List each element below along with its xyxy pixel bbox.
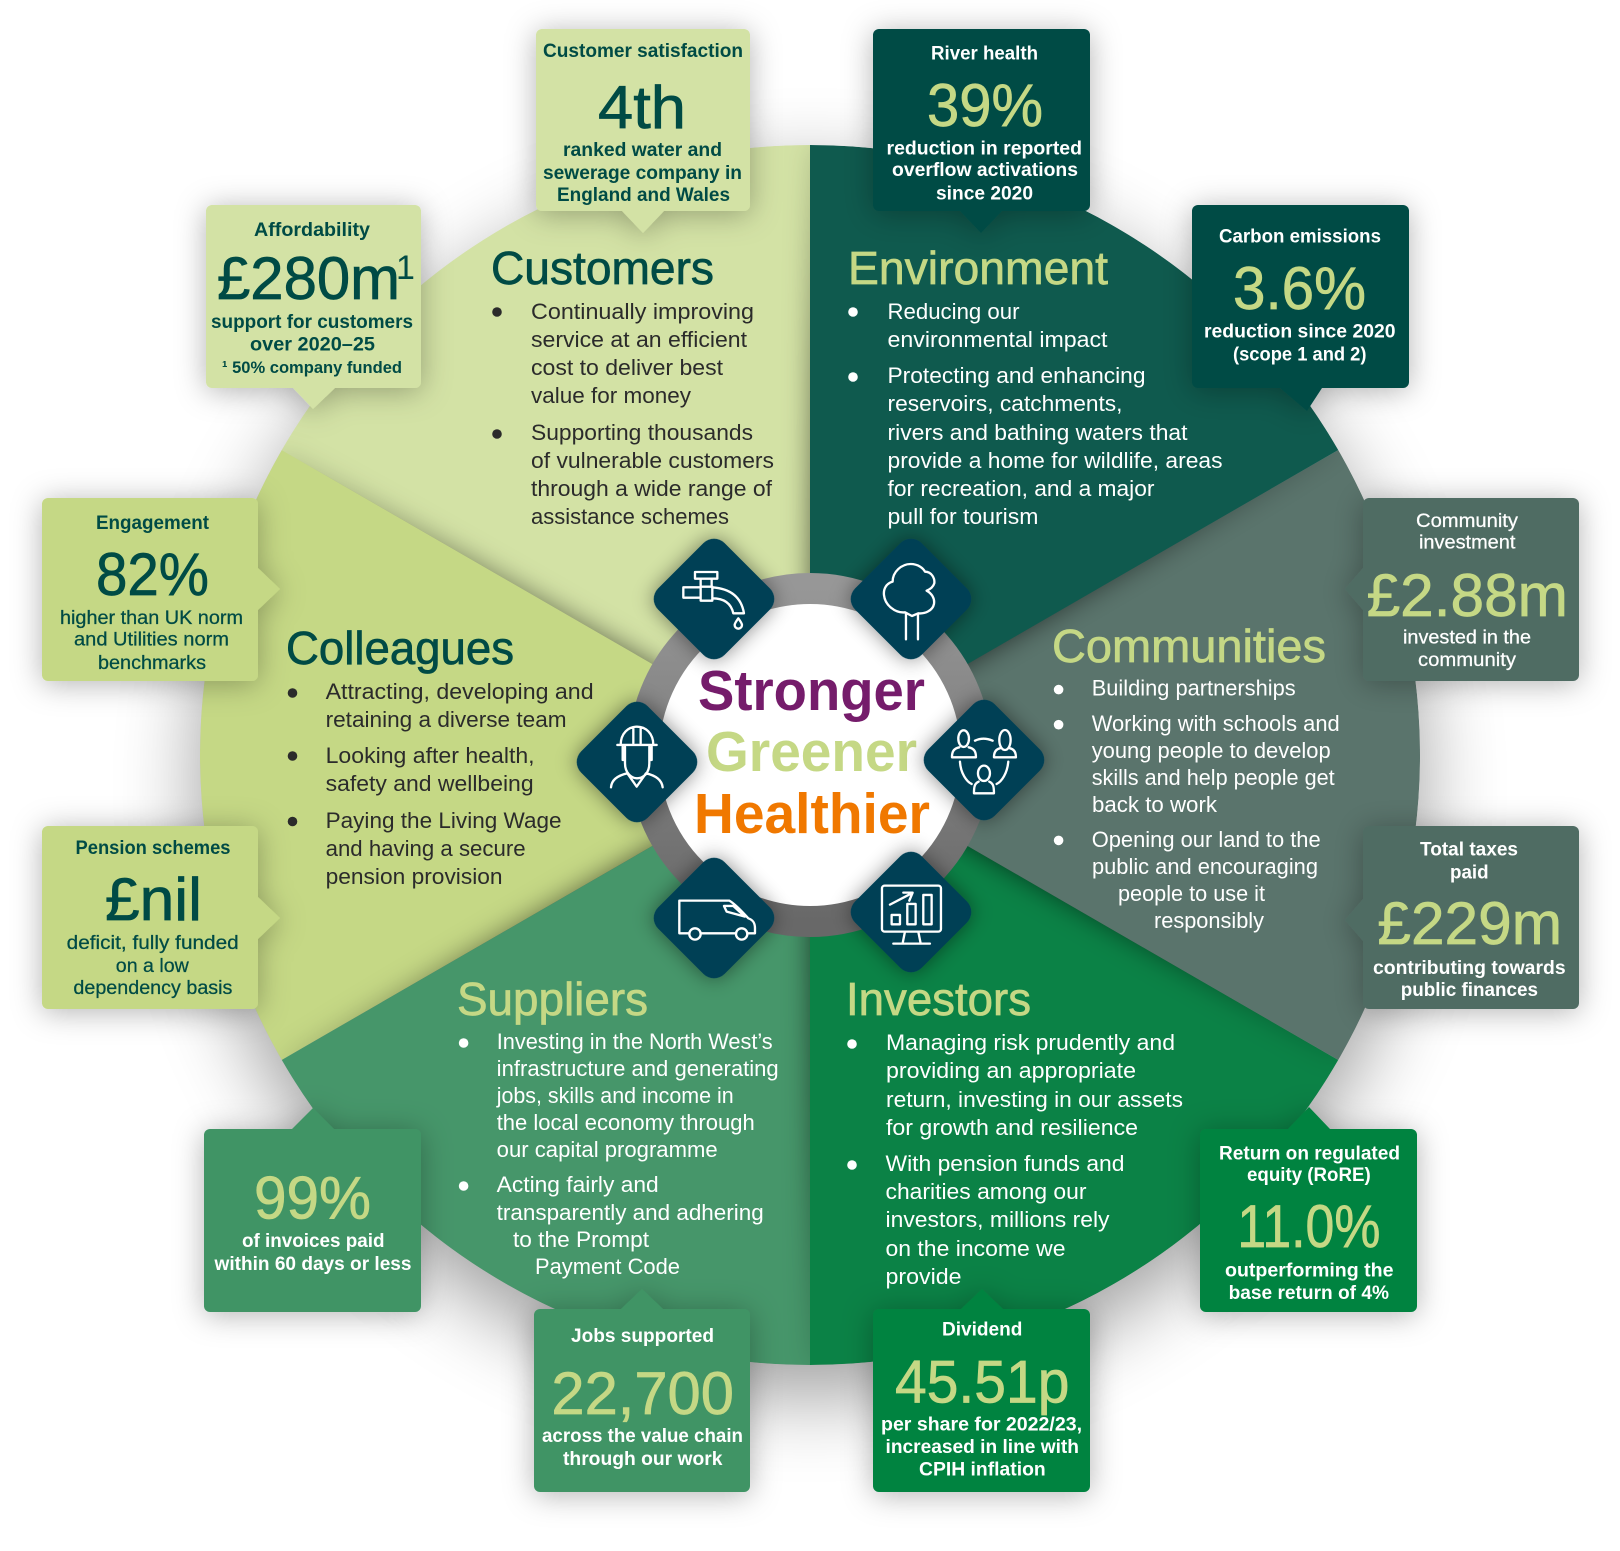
- bullet list: investors: Managing risk prudently and: [886, 1030, 1175, 1055]
- callout background: [873, 29, 1090, 233]
- bullet list: communities: Building partnerships: [1092, 676, 1296, 700]
- central slogan: [694, 659, 930, 846]
- bullet list: suppliers: the local economy through: [497, 1110, 755, 1135]
- bullet list: communities: Working with schools and: [1092, 711, 1340, 736]
- heading: colleagues: Colleagues: [286, 622, 514, 674]
- callout description: ¹ 50% company funded: [222, 359, 402, 377]
- bullet list: communities: Opening our land to the: [1092, 827, 1321, 852]
- callout description: of invoices paid: [242, 1231, 384, 1252]
- bullet list: customers: assistance schemes: [531, 504, 729, 529]
- callout title: paid: [1450, 862, 1489, 884]
- bullet list: communities: [1054, 676, 1340, 933]
- bullet list: customers: through a wide range of: [531, 476, 773, 501]
- callout description: [211, 312, 413, 377]
- callout description: [886, 138, 1082, 204]
- figure: 4th: 4th: [598, 74, 686, 141]
- bullet list: colleagues: Attracting, developing and: [326, 679, 594, 704]
- callout title: Total taxes: [1420, 840, 1518, 861]
- callout: carbon emissions: [1192, 205, 1409, 411]
- slogan: Stronger: Stronger: [698, 659, 925, 723]
- callout description: reduction since 2020: [1204, 322, 1396, 343]
- bullet list: investors: on the income we: [886, 1236, 1066, 1261]
- callout: river health: [873, 29, 1090, 233]
- callout background: [206, 205, 421, 409]
- bullet list: investors: With pension funds and: [886, 1151, 1124, 1176]
- sector: communities: [968, 450, 1420, 1060]
- callout description: [543, 140, 742, 206]
- bullet list: investors: investors, millions rely: [886, 1207, 1110, 1232]
- bullet list: environment: for recreation, and a major: [888, 476, 1154, 501]
- figure: £2.88m: £2.88m: [1367, 562, 1568, 629]
- callout description: [1403, 628, 1531, 671]
- panel: communities: [1052, 620, 1340, 933]
- callout: total taxes paid: [1345, 826, 1579, 1009]
- callout background: [873, 1289, 1090, 1492]
- bullet list: colleagues: Paying the Living Wage: [326, 808, 562, 833]
- heading: suppliers: Suppliers: [457, 973, 648, 1025]
- bullet list: suppliers: jobs, skills and income in: [496, 1083, 734, 1108]
- bullet list: customers: value for money: [531, 383, 691, 408]
- callout: return on regulated equity: [1200, 1107, 1417, 1312]
- bullet list: communities: skills and help people get: [1092, 765, 1335, 790]
- callout description: dependency basis: [73, 978, 232, 999]
- disc shadow: [200, 175, 1420, 1395]
- bullet list: investors: provide: [886, 1264, 962, 1289]
- bullet list: environment: reservoirs, catchments,: [888, 391, 1122, 416]
- callout background: [1345, 498, 1579, 681]
- bullet list: colleagues: retaining a diverse team: [326, 707, 567, 732]
- bullet list: colleagues: pension provision: [326, 864, 503, 889]
- callout description: on a low: [116, 956, 189, 977]
- callout background: [536, 29, 750, 233]
- bullet list: suppliers: Payment Code: [535, 1254, 680, 1279]
- callout description: support for customers: [211, 312, 413, 333]
- centre ring: [644, 588, 976, 922]
- figure: £229m: £229m: [1377, 890, 1562, 957]
- icon diamonds: [571, 533, 1050, 984]
- bullet list: communities: public and encouraging: [1092, 854, 1318, 879]
- bullet list: communities: young people to develop: [1092, 738, 1331, 763]
- heading: communities: Communities: [1052, 620, 1326, 672]
- bullet list: communities: responsibly: [1154, 908, 1264, 933]
- callout background: [1192, 205, 1409, 411]
- bullet list: environment: environmental impact: [888, 327, 1108, 352]
- slogan: Greener: Greener: [706, 720, 917, 784]
- callout description: [1204, 322, 1396, 365]
- bullet list: colleagues: safety and wellbeing: [326, 771, 534, 796]
- bullet list: environment: rivers and bathing waters that: [888, 420, 1188, 445]
- sector: investors: [810, 846, 1338, 1365]
- callout title: Community: [1416, 511, 1519, 532]
- panel: suppliers: [457, 973, 779, 1279]
- callout description: England and Wales: [557, 185, 730, 206]
- bullet list: suppliers: [459, 1029, 779, 1279]
- callout description: [881, 1414, 1082, 1480]
- callout description: [542, 1426, 743, 1470]
- sector: colleagues: [200, 450, 652, 1060]
- figure: 45.51p: 45.51p: [895, 1349, 1069, 1416]
- callout description: across the value chain: [542, 1426, 743, 1447]
- callout: engagement: [42, 498, 280, 681]
- bullet list: suppliers: to the Prompt: [513, 1227, 649, 1252]
- callout description: benchmarks: [98, 653, 206, 674]
- callout description: [1373, 958, 1566, 1001]
- callout description: [1225, 1260, 1394, 1304]
- callout description: deficit, fully funded: [67, 933, 239, 954]
- bullet list: environment: Reducing our: [888, 299, 1020, 324]
- bullet list: customers: [492, 299, 774, 529]
- callout: affordability: [206, 205, 421, 409]
- callout: dividend: [873, 1289, 1090, 1492]
- slogan: Healthier: Healthier: [694, 782, 930, 846]
- bullet list: customers: service at an efficient: [531, 327, 747, 352]
- callout description: through our work: [563, 1449, 723, 1470]
- bullet list: communities: back to work: [1092, 792, 1218, 817]
- figure: 22,700: 22,700: [551, 1360, 734, 1427]
- callout description: higher than UK norm: [60, 608, 243, 629]
- bullet list: environment: [848, 299, 1222, 529]
- callout title: investment: [1419, 532, 1516, 554]
- callout description: within 60 days or less: [213, 1254, 412, 1275]
- callout description: ranked water and: [563, 140, 722, 161]
- callout: invoices paid: [204, 1108, 421, 1312]
- bullet list: environment: pull for tourism: [888, 504, 1038, 529]
- sector: customers: [282, 145, 810, 664]
- heading: customers: Customers: [491, 242, 714, 294]
- callout title: [1219, 1144, 1400, 1186]
- callout: jobs supported: [534, 1289, 750, 1492]
- callout title: equity (RoRE): [1247, 1165, 1371, 1186]
- callout title: Affordability: [254, 220, 370, 241]
- callout description: per share for 2022/23,: [881, 1414, 1082, 1436]
- callout title: Customer satisfaction: [543, 41, 743, 62]
- callout background: [1345, 826, 1579, 1009]
- callout title: Pension schemes: [76, 838, 230, 859]
- callout description: CPIH inflation: [919, 1460, 1046, 1480]
- bullet list: investors: return, investing in our assets: [886, 1087, 1183, 1112]
- panel: colleagues: [286, 622, 594, 889]
- bullet list: colleagues: [288, 679, 594, 889]
- bullet list: customers: of vulnerable customers: [531, 448, 774, 473]
- panel: environment: [848, 242, 1222, 529]
- bullet list: suppliers: Investing in the North West’s: [497, 1029, 773, 1054]
- callout description: over 2020–25: [250, 334, 375, 356]
- figure: 82%: 82%: [96, 541, 209, 608]
- callout description: [213, 1231, 412, 1275]
- bullet list: colleagues: and having a secure: [326, 836, 526, 861]
- bullet list: customers: cost to deliver best: [531, 355, 723, 380]
- sector: environment: [810, 145, 1338, 664]
- callout background: [1200, 1107, 1417, 1312]
- panel: customers: [491, 242, 774, 529]
- heading: environment: Environment: [848, 242, 1108, 294]
- callout: community investment: [1345, 498, 1579, 681]
- callout title: River health: [931, 44, 1038, 64]
- heading: investors: Investors: [846, 973, 1031, 1025]
- callout title: Return on regulated: [1219, 1144, 1400, 1165]
- callout description: overflow activations: [892, 160, 1078, 181]
- callout background: [534, 1289, 750, 1492]
- figure: 99%: 99%: [254, 1165, 371, 1232]
- bullet list: environment: Protecting and enhancing: [888, 363, 1146, 388]
- icon: tap: [648, 533, 780, 665]
- bullet list: environment: provide a home for wildlife, areas: [888, 448, 1222, 473]
- callout description: and Utilities norm: [74, 630, 229, 650]
- bullet list: suppliers: Acting fairly and: [497, 1172, 659, 1197]
- bullet list: investors: charities among our: [886, 1179, 1086, 1204]
- bullet list: suppliers: transparently and adhering: [497, 1200, 764, 1225]
- bullet list: communities: people to use it: [1118, 881, 1265, 906]
- wheel of six sectors: [200, 145, 1420, 1365]
- icon: van: [648, 852, 780, 984]
- callout description: contributing towards: [1373, 958, 1566, 979]
- callout: customer satisfaction: [536, 29, 750, 233]
- callout description: [67, 933, 239, 999]
- bullet list: investors: providing an appropriate: [886, 1058, 1136, 1083]
- callout title: Jobs supported: [571, 1326, 714, 1347]
- bullet list: investors: for growth and resilience: [886, 1115, 1138, 1140]
- icon: tree: [845, 533, 977, 665]
- figure: £nil: £nil: [105, 866, 202, 933]
- callout description: (scope 1 and 2): [1233, 344, 1366, 365]
- callout description: [60, 608, 243, 674]
- callout description: reduction in reported: [886, 138, 1082, 160]
- callout title: Engagement: [96, 513, 210, 534]
- sector: suppliers: [282, 846, 810, 1365]
- bullet list: investors: [847, 1030, 1183, 1289]
- figure: 3.6%: 3.6%: [1233, 255, 1366, 322]
- callout background: [204, 1108, 421, 1312]
- callout title: Dividend: [942, 1319, 1022, 1340]
- bullet list: customers: Continually improving: [531, 299, 754, 324]
- bullet list: suppliers: infrastructure and generating: [497, 1056, 779, 1081]
- callout description: base return of 4%: [1229, 1283, 1389, 1304]
- callout description: increased in line with: [886, 1437, 1079, 1458]
- callout background: [42, 498, 280, 681]
- figure: 39%: 39%: [927, 72, 1043, 139]
- callout title: [1420, 840, 1518, 884]
- footnote marker: 1: [396, 249, 415, 287]
- callout title: Carbon emissions: [1219, 226, 1381, 248]
- callout background: [42, 826, 280, 1009]
- panel: investors: [846, 973, 1183, 1289]
- bullet list: customers: Supporting thousands: [531, 420, 753, 445]
- callout description: community: [1418, 650, 1517, 671]
- bullet list: suppliers: our capital programme: [497, 1137, 718, 1162]
- callout description: invested in the: [1403, 628, 1531, 648]
- figure: £280m: £280m: [217, 245, 400, 312]
- bullet list: colleagues: Looking after health,: [326, 743, 535, 768]
- icon: people network: [918, 694, 1050, 826]
- callout description: outperforming the: [1225, 1260, 1394, 1282]
- icon: chart on monitor: [845, 846, 977, 978]
- callout description: sewerage company in: [543, 163, 742, 184]
- callout description: since 2020: [936, 184, 1033, 204]
- icon: construction worker: [571, 696, 703, 828]
- callout: pension schemes: [42, 826, 280, 1009]
- callout title: [1416, 511, 1519, 554]
- callout description: public finances: [1401, 980, 1538, 1001]
- figure: 11.0%: 11.0%: [1237, 1193, 1380, 1260]
